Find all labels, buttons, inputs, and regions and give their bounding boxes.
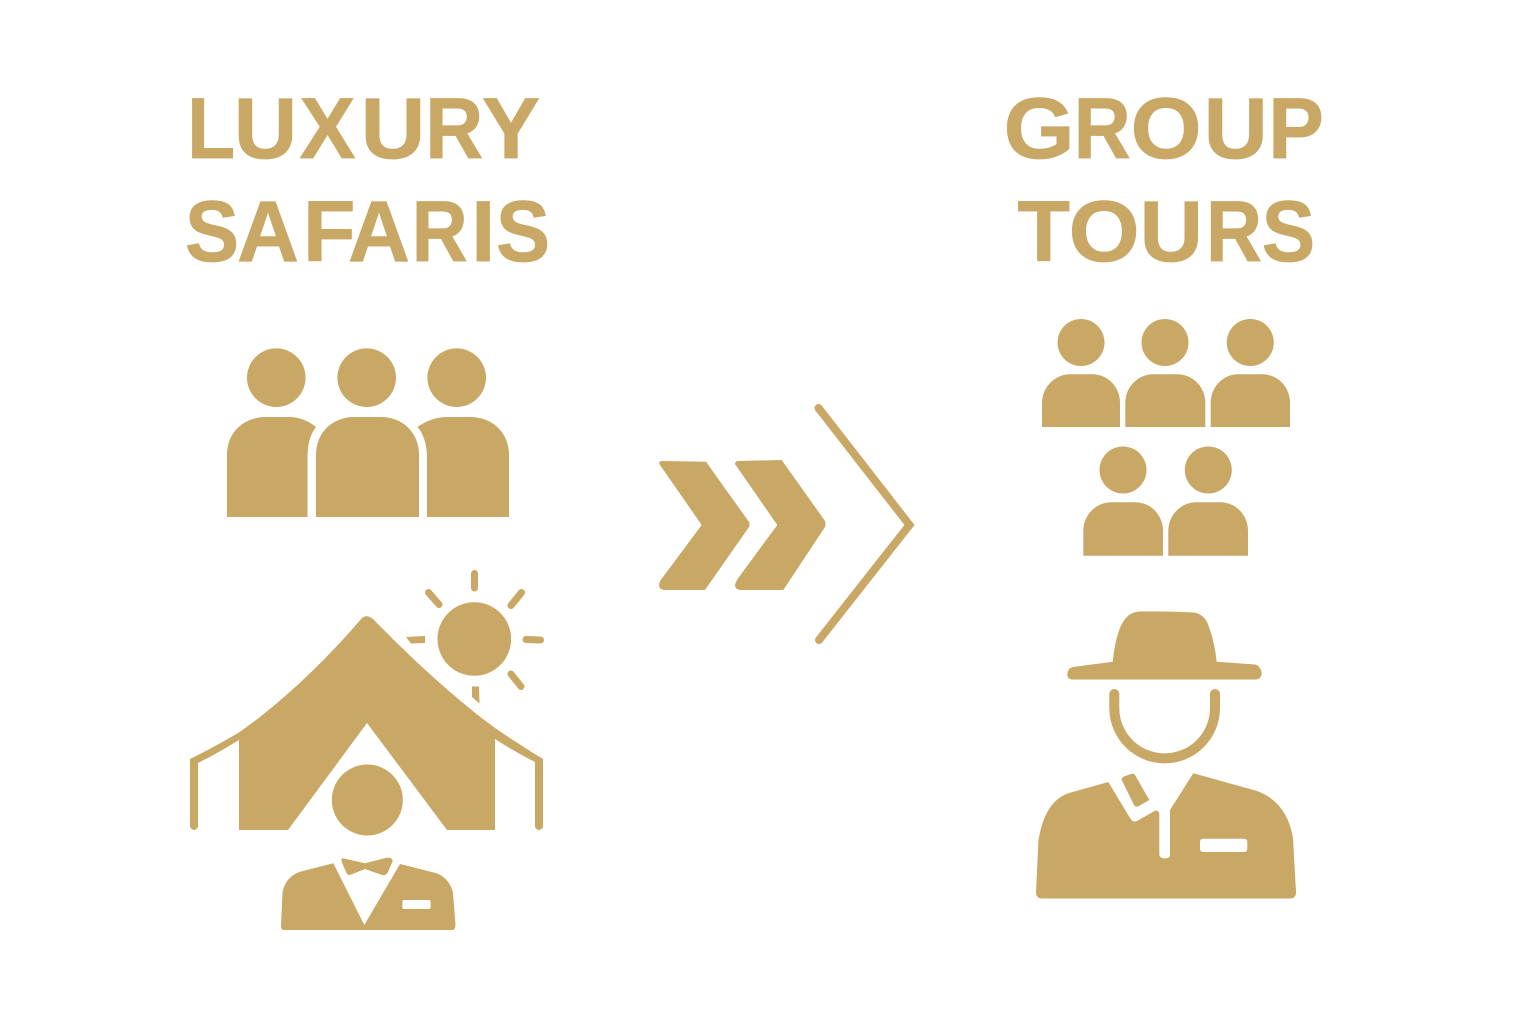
- heading: luxury safaris: S: [185, 184, 239, 280]
- heading: luxury safaris: U: [361, 81, 425, 177]
- icon: small group of three people: [227, 348, 509, 517]
- heading: luxury safaris: I: [471, 184, 495, 280]
- heading: luxury safaris: R: [412, 184, 468, 280]
- icon: tour guide with hat: [1036, 611, 1296, 898]
- heading: group tours: R: [1206, 184, 1262, 280]
- heading: luxury safaris: R: [425, 81, 483, 177]
- heading: group tours: U: [1204, 81, 1268, 177]
- panel: group tours: [1004, 81, 1324, 898]
- heading: group tours: T: [1018, 184, 1070, 280]
- heading: group tours: U: [1140, 184, 1203, 280]
- arrow: double chevron transition: [659, 408, 910, 640]
- heading: luxury safaris: L: [187, 81, 235, 177]
- icon: butler figure: [281, 764, 456, 930]
- heading: luxury safaris: [185, 81, 550, 280]
- heading: luxury safaris: X: [300, 81, 356, 177]
- heading: group tours: G: [1004, 81, 1075, 177]
- icon: safari tent with sun: [190, 574, 543, 830]
- heading: luxury safaris: Y: [482, 81, 540, 177]
- heading: group tours: [1004, 81, 1324, 280]
- panel: luxury safaris: [185, 81, 550, 930]
- heading: group tours: P: [1268, 81, 1324, 177]
- icon: large group of five people: [1042, 319, 1290, 556]
- heading: luxury safaris: S: [496, 184, 550, 280]
- heading: luxury safaris: U: [234, 81, 297, 177]
- heading: group tours: O: [1069, 184, 1140, 280]
- heading: luxury safaris: F: [303, 184, 356, 280]
- heading: luxury safaris: A: [237, 184, 299, 280]
- heading: group tours: S: [1262, 184, 1315, 280]
- heading: group tours: O: [1131, 81, 1202, 177]
- heading: luxury safaris: A: [348, 184, 410, 280]
- heading: group tours: R: [1074, 81, 1131, 177]
